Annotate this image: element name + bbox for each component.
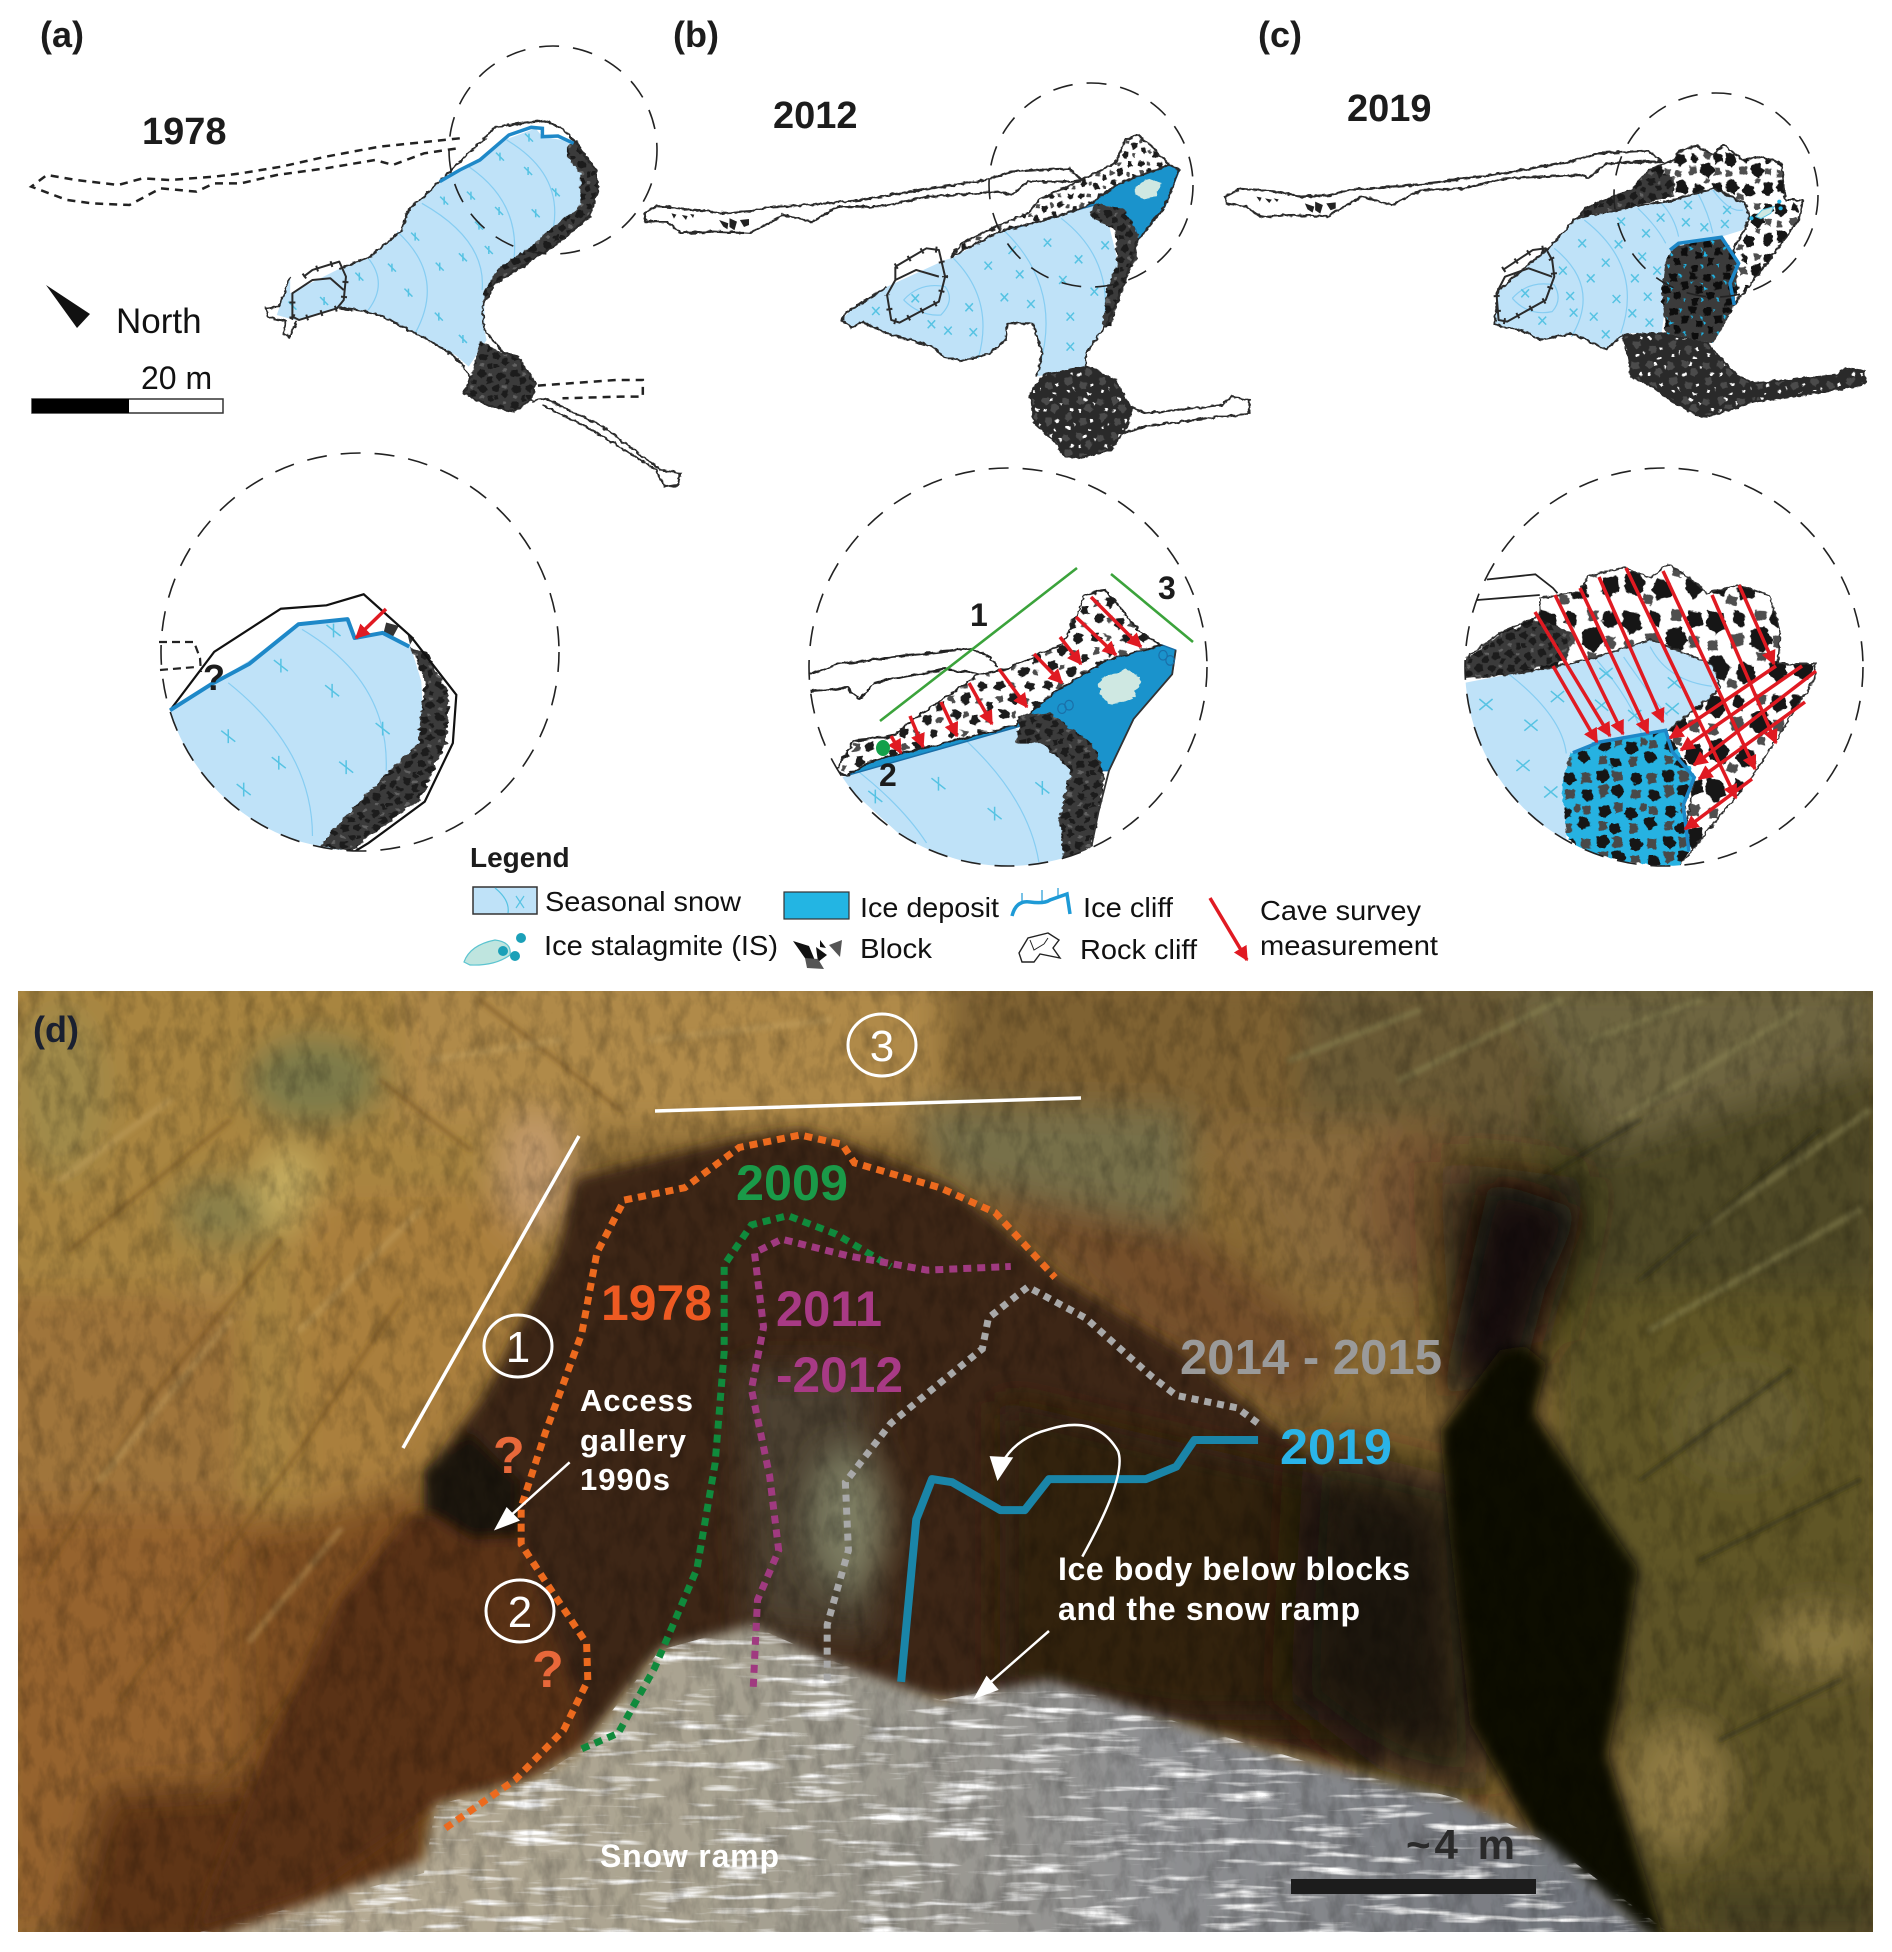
question mark: ? <box>203 657 225 698</box>
rock tones <box>0 960 1890 1952</box>
inset: 1978 enlarged <box>159 453 559 852</box>
black chasm <box>1440 1346 1668 1950</box>
year heading 2012: 2012 <box>773 95 858 137</box>
access arrow <box>503 1462 570 1522</box>
map: 2019 cave plan <box>1225 145 1865 417</box>
green sector lines <box>880 568 1193 721</box>
rock cliff ticks <box>292 262 346 320</box>
access arrow head <box>494 1507 520 1531</box>
sector numbers: 3 <box>1158 570 1176 606</box>
2011-2012 margin <box>751 1239 1011 1687</box>
southern block pile <box>1623 333 1760 417</box>
rock cliff loops <box>292 262 346 320</box>
inset ice cliff <box>170 619 409 710</box>
rock cliff loops <box>1496 248 1554 322</box>
straight white arrow to ramp <box>982 1631 1049 1690</box>
gallery blocks <box>1256 197 1336 214</box>
map: 2012 cave plan <box>645 134 1250 458</box>
inset: 2012 enlarged <box>809 468 1207 867</box>
snow ramp <box>180 1625 1668 1950</box>
inset ice stalagmite <box>1098 669 1141 705</box>
lower dashed gallery <box>538 380 643 398</box>
curved arrow head <box>990 1456 1013 1481</box>
inset circle <box>1465 468 1863 866</box>
rock cliff ticks <box>887 248 945 323</box>
dotted ice margin lines <box>445 1135 1258 1828</box>
annotation: snow ramp: Snow ramp <box>600 1838 779 1874</box>
seasonal snow <box>841 203 1119 377</box>
legend: block: Block <box>860 933 933 964</box>
inset contours <box>853 740 1039 862</box>
map: 1978 cave plan <box>31 121 681 487</box>
annotation: ice body <box>1058 1551 1410 1627</box>
circled 3: 3 <box>870 1022 894 1071</box>
lower block pile <box>1030 367 1132 458</box>
cave interior <box>194 1129 1380 1932</box>
lower gallery <box>1123 397 1250 433</box>
inset blocks <box>319 647 449 852</box>
cave outline <box>841 165 1179 377</box>
cave outline <box>1494 218 1623 349</box>
snow streak highlights <box>200 1625 1668 1932</box>
inset gallery <box>809 648 997 698</box>
sector numbers <box>879 570 1176 793</box>
blocks along wall <box>482 140 598 308</box>
photo scale bar <box>1291 1879 1536 1894</box>
question marks: ? <box>493 1427 525 1485</box>
white sector lines <box>403 1098 1081 1448</box>
legend <box>464 842 1438 969</box>
inset red measurement <box>356 609 386 638</box>
inset gallery <box>1476 574 1557 600</box>
legend: ice stalagmite <box>464 930 778 965</box>
inset upper block area <box>1465 564 1816 864</box>
question marks: ? <box>532 1641 564 1699</box>
rock cliff ticks <box>1496 248 1554 322</box>
snow contours <box>1512 190 1743 337</box>
inset wall <box>1091 650 1176 846</box>
panel (d): cave photograph <box>0 960 1890 1952</box>
access gallery <box>645 168 1082 233</box>
inset crosses <box>868 777 1049 821</box>
cave wall outline <box>266 121 598 412</box>
red measurement arrows <box>1535 568 1816 829</box>
legend: ice cliff: Ice cliff <box>1083 892 1173 923</box>
snow crosses <box>288 134 560 343</box>
annotation: access gallery: Access <box>580 1383 693 1418</box>
north arrow <box>46 285 202 341</box>
scale bar 20 m <box>32 360 223 413</box>
lower gallery <box>531 398 681 487</box>
legend: seasonal snow: Seasonal snow <box>545 886 742 917</box>
legend: cave survey measurement: Cave survey <box>1260 895 1421 926</box>
legend: cave survey measurement: measurement <box>1260 930 1438 961</box>
ice stalagmite <box>1749 200 1783 220</box>
small ice circles <box>1058 650 1174 713</box>
inset snow <box>1465 640 1721 840</box>
upper block area <box>1576 145 1803 305</box>
dense west blocks <box>1465 619 1571 678</box>
legend: ice stalagmite: Ice stalagmite (IS) <box>544 930 778 961</box>
photo scale label: ~4 m <box>1406 1821 1515 1868</box>
1978 margin <box>445 1135 1055 1828</box>
dashed former access gallery <box>31 138 460 205</box>
legend: rock cliff: Rock cliff <box>1080 934 1197 965</box>
annotation: ice body: Ice body below blocks <box>1058 1551 1410 1587</box>
2019 margin <box>901 1440 1258 1682</box>
inset crosses <box>221 624 390 796</box>
upper block band <box>951 134 1169 257</box>
2009 margin <box>582 1216 891 1749</box>
circled 1: 1 <box>506 1323 530 1372</box>
photo background: rock, cave and snow <box>0 960 1890 1952</box>
inset upper block band <box>835 590 1162 776</box>
annotation: access gallery: gallery <box>580 1423 687 1458</box>
zoom circle on 1978 map <box>449 46 657 254</box>
scale bar 20 m: 20 m <box>141 360 212 396</box>
curved white arrow <box>999 1425 1120 1557</box>
snow crosses <box>872 239 1109 351</box>
inset ice deposit <box>846 645 1176 776</box>
inset contours <box>228 629 386 836</box>
legend: cave survey measurement <box>1210 895 1438 961</box>
seasonal snow <box>1494 188 1749 349</box>
inset wall <box>170 594 456 852</box>
block pile at chamber exit <box>464 342 536 412</box>
panel label (b): (b) <box>673 14 719 55</box>
panel label (c): (c) <box>1258 14 1302 55</box>
red measurement arrows <box>891 597 1141 753</box>
gallery blocks <box>671 213 749 230</box>
inset crosses <box>1479 668 1681 797</box>
sector numbers: 1 <box>970 597 988 633</box>
circled 2 <box>486 1580 554 1642</box>
label 2009: 2009 <box>736 1155 848 1211</box>
snow crosses <box>1521 201 1731 338</box>
circled 1 <box>484 1315 552 1377</box>
upper chasm shadow <box>1440 1180 1580 1400</box>
zoom circle on 2012 map <box>989 83 1193 287</box>
dense blocks at west band <box>1578 170 1674 218</box>
sparse blocks by cliff <box>383 623 414 645</box>
inset ice cliff <box>1573 730 1694 852</box>
annotation: ice body: and the snow ramp <box>1058 1591 1360 1627</box>
sector numbers: 2 <box>879 757 897 793</box>
lower gallery with blocks <box>1756 368 1865 402</box>
ice deposit <box>999 165 1179 240</box>
inset snow <box>839 728 1074 867</box>
label 1978: 1978 <box>601 1275 712 1331</box>
inset contours <box>1509 647 1712 753</box>
panel label (d): (d) <box>33 1009 79 1050</box>
label 2011: 2011 <box>776 1281 882 1337</box>
pale ice behind margins and dark east interior <box>740 1370 1400 1720</box>
north arrow: North <box>116 302 202 341</box>
snow contours <box>904 218 1105 363</box>
legend title: Legend <box>470 842 570 873</box>
legend: ice cliff <box>1012 888 1173 923</box>
inset snow <box>170 619 425 852</box>
ice cliff line <box>440 127 574 182</box>
question marks <box>493 1427 564 1699</box>
year heading 2019: 2019 <box>1347 88 1432 130</box>
2014-2015 margin <box>827 1287 1258 1681</box>
ice stalagmite <box>1136 178 1161 199</box>
legend: block <box>793 933 933 969</box>
label 2014 - 2015: 2014 - 2015 <box>1180 1331 1442 1385</box>
inset circle <box>809 468 1207 866</box>
inner block band <box>1090 203 1138 327</box>
zoom circle on 2019 map <box>1614 93 1818 297</box>
circled 3 <box>848 1014 916 1076</box>
darkness around chasm <box>1290 1160 1590 1800</box>
legend: ice deposit <box>784 892 999 923</box>
label -2012: -2012 <box>776 1347 903 1403</box>
ice cliff line <box>1670 237 1739 305</box>
straight arrow head <box>973 1676 999 1699</box>
label 2019: 2019 <box>1280 1419 1392 1475</box>
snow contours <box>368 140 555 333</box>
circled 2: 2 <box>508 1588 532 1637</box>
legend: ice deposit: Ice deposit <box>860 892 999 923</box>
central ice below blocks <box>1661 237 1739 343</box>
legend: rock cliff <box>1019 933 1197 965</box>
dashed gallery remnant <box>159 642 201 672</box>
central ice with blocks <box>1562 731 1694 867</box>
rock cliff loops <box>887 248 945 323</box>
access gallery <box>1225 151 1661 217</box>
rock streaks and cracks <box>40 1000 1870 1800</box>
rock texture grain <box>18 991 1873 1932</box>
seasonal snow <box>277 128 589 367</box>
inset circle <box>161 453 559 851</box>
panel label (a): (a) <box>40 14 84 55</box>
green point 2 <box>876 740 890 756</box>
inset inner block band <box>1014 712 1106 862</box>
annotation: access gallery: 1990s <box>580 1462 670 1497</box>
inset: 2019 enlarged <box>1465 468 1863 867</box>
annotation: access gallery <box>580 1383 693 1497</box>
year heading 1978: 1978 <box>142 111 227 153</box>
